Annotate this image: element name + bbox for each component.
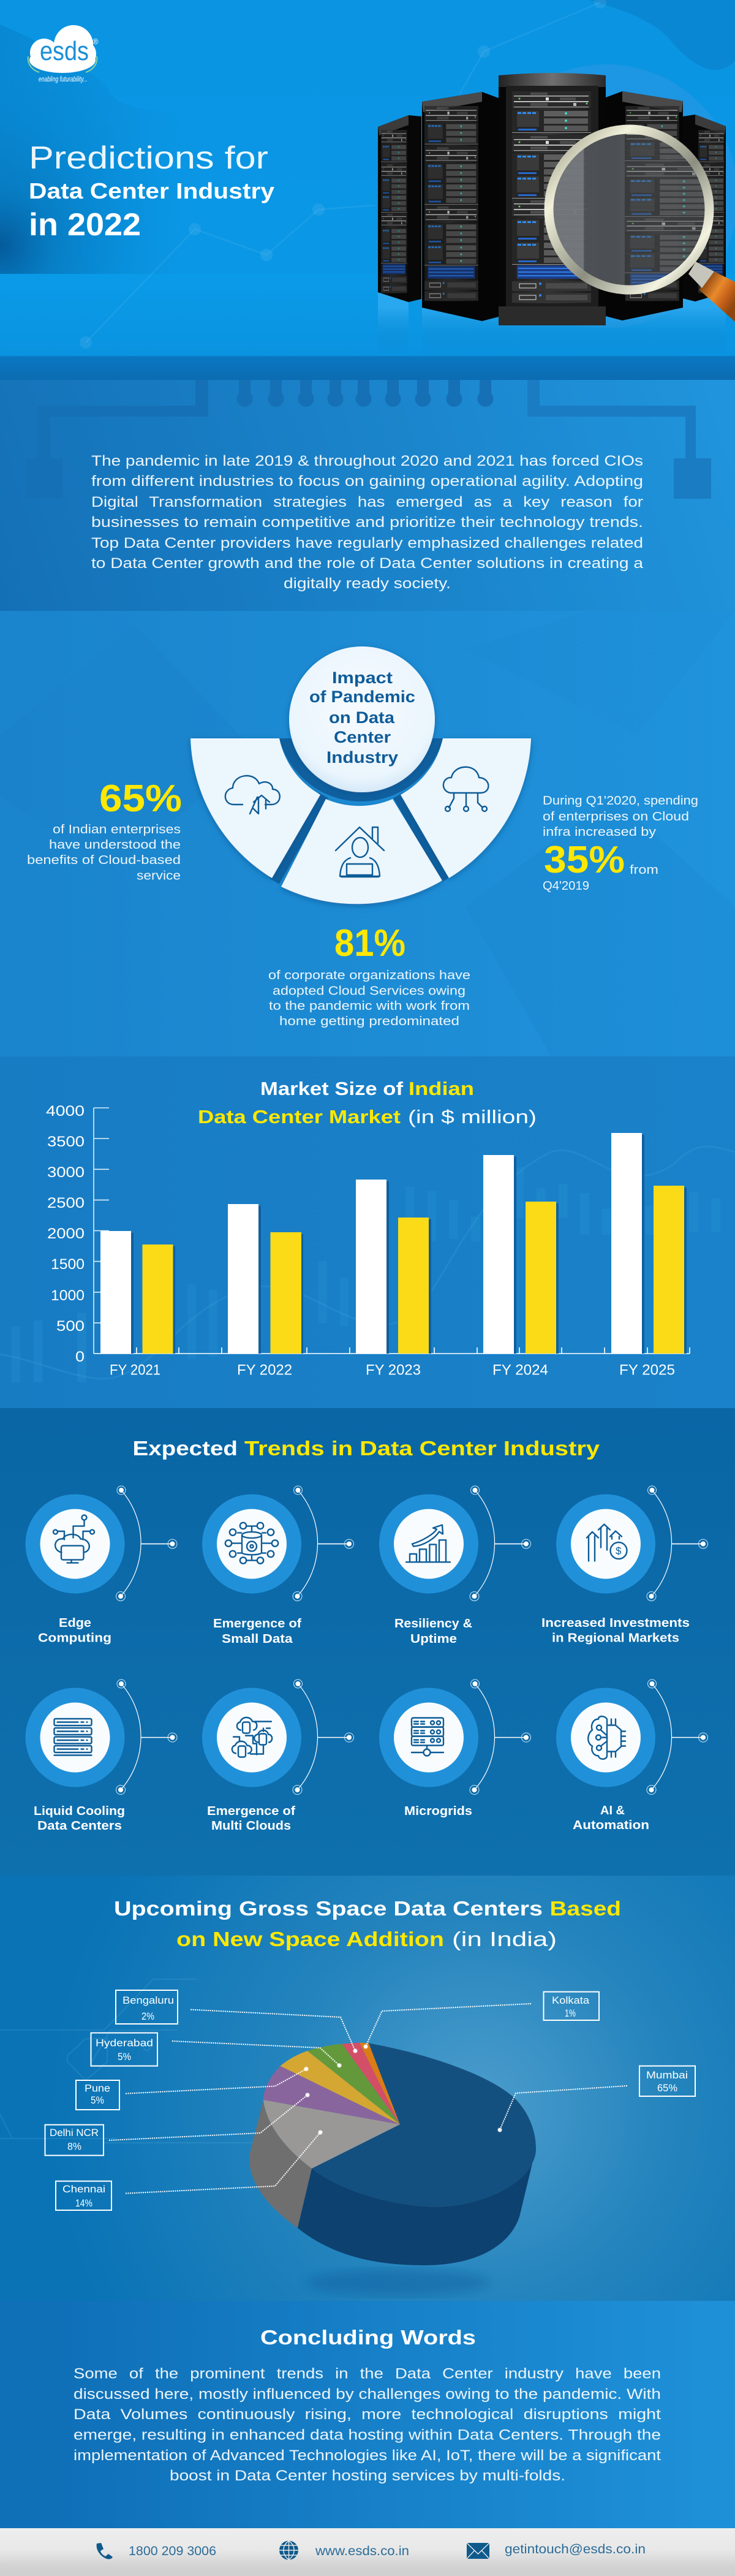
chart title: Indian bbox=[409, 1078, 474, 1099]
centre circle: Impact bbox=[332, 669, 393, 687]
trend: resiliency and uptime: Resiliency & bbox=[394, 1617, 472, 1631]
stat: 35%: During Q1'2020, spending bbox=[543, 794, 698, 808]
trend: regional investments: $ bbox=[616, 1545, 622, 1557]
segment: cloud network bbox=[401, 738, 531, 878]
trend: edge computing: Edge bbox=[59, 1616, 91, 1630]
stat: 81%: adopted Cloud Services owing bbox=[273, 984, 466, 998]
centre circle: on Data bbox=[329, 708, 395, 727]
illustration: server racks with magnifier bbox=[378, 73, 735, 327]
stat: 35%: Q4'2019 bbox=[543, 879, 589, 893]
logo: esds cloud bbox=[28, 25, 99, 83]
label: Bengaluru: Bengaluru bbox=[123, 1995, 174, 2006]
stat: 65%: service bbox=[137, 869, 181, 882]
contact: website: www.esds.co.in bbox=[315, 2544, 409, 2558]
heading: predictions title bbox=[29, 140, 274, 243]
text block: intro paragraph: from different industries to focus on gaining operational agility. Adopting bbox=[91, 473, 643, 490]
trend: emergence of small data bbox=[202, 1486, 354, 1646]
text block: concluding paragraph: Data Volumes continuously rising, more technological disruptions might bbox=[74, 2406, 661, 2423]
pie heading: Based bbox=[550, 1897, 621, 1920]
contact: email: getintouch@esds.co.in bbox=[505, 2542, 646, 2556]
pie heading bbox=[114, 1897, 621, 1950]
stat: 65%: have understood the bbox=[49, 838, 181, 852]
circuit board decoration bbox=[26, 380, 711, 499]
heading: predictions title: Data Center Industry bbox=[29, 178, 274, 203]
text block: intro paragraph bbox=[91, 453, 644, 592]
stat: 65%: benefits of Cloud-based bbox=[27, 853, 181, 867]
trend: microgrids: Microgrids bbox=[404, 1805, 472, 1818]
trend: multi clouds: Emergence of bbox=[207, 1805, 295, 1818]
trend: liquid cooling data centers bbox=[26, 1680, 177, 1833]
label: Kolkata: Kolkata bbox=[552, 1995, 590, 2006]
bars: FY 2025 bbox=[611, 1133, 687, 1354]
x axis: FY 2025 bbox=[619, 1362, 675, 1379]
trends heading: Expected bbox=[132, 1437, 238, 1460]
trend: edge computing: Computing bbox=[38, 1631, 111, 1645]
y axis: 1500 bbox=[51, 1256, 85, 1273]
leader lines bbox=[109, 2004, 627, 2194]
label: Pune bbox=[76, 2080, 119, 2110]
pie heading: (in India) bbox=[452, 1928, 557, 1950]
trend: edge computing bbox=[26, 1486, 177, 1645]
bars: FY 2024 bbox=[483, 1155, 559, 1354]
3D pie chart bbox=[249, 2043, 536, 2296]
label: Delhi NCR bbox=[45, 2125, 104, 2156]
trend: liquid cooling data centers: Liquid Cooling bbox=[34, 1805, 125, 1818]
x axis: FY 2021 bbox=[110, 1362, 160, 1379]
bars: FY 2023 bbox=[356, 1180, 431, 1354]
y axis: 2500 bbox=[47, 1195, 85, 1211]
concluding heading: Concluding Words bbox=[260, 2326, 476, 2349]
logo: esds cloud: enabling futurability... bbox=[39, 76, 88, 83]
text block: intro paragraph: Top Data Center providers have regularly emphasized challenges related bbox=[91, 535, 643, 551]
panel: hero header bbox=[0, 0, 735, 380]
text block: intro paragraph: digitally ready society. bbox=[284, 575, 451, 592]
trend: multi clouds: Multi Clouds bbox=[211, 1819, 291, 1833]
segment: work from home bbox=[281, 799, 442, 904]
panel: introduction bbox=[0, 380, 735, 611]
label: Pune: 5% bbox=[91, 2094, 104, 2106]
stat: 35%: from bbox=[630, 863, 658, 877]
stat: 81%: to the pandemic with work from bbox=[269, 999, 470, 1013]
y axis: 0 bbox=[75, 1349, 85, 1365]
label: Kolkata bbox=[544, 1992, 599, 2020]
trend: microgrids bbox=[379, 1680, 530, 1818]
label: Bengaluru: 2% bbox=[141, 2010, 154, 2022]
panel: expected trends bbox=[0, 1408, 735, 1876]
label: Chennai: 14% bbox=[75, 2197, 92, 2209]
trend: regional investments bbox=[541, 1486, 708, 1645]
centre circle: of Pandemic bbox=[309, 688, 415, 706]
y axis: 3000 bbox=[47, 1164, 85, 1181]
logo: esds cloud: ® bbox=[92, 37, 99, 46]
contact: phone: 1800 209 3006 bbox=[129, 2544, 216, 2558]
text block: concluding paragraph: emerge, resulting in enhanced data hosting within Data Centers. Through the bbox=[74, 2427, 661, 2444]
x axis: FY 2022 bbox=[237, 1362, 292, 1379]
heading: predictions title: in 2022 bbox=[29, 207, 141, 243]
label: Hyderabad: Hyderabad bbox=[96, 2037, 153, 2049]
label: Kolkata: 1% bbox=[565, 2007, 576, 2019]
centre circle: Center bbox=[334, 728, 391, 746]
stat: 35%: of enterprises on Cloud bbox=[543, 809, 689, 824]
stat: 35%: infra increased by bbox=[543, 825, 657, 839]
label: Delhi NCR: 8% bbox=[67, 2141, 81, 2153]
text block: concluding paragraph: implementation of Advanced Technologies like AI, IoT, there will be a significant bbox=[74, 2447, 661, 2464]
y axis: 2000 bbox=[47, 1225, 85, 1242]
stat: 81%: 81% bbox=[334, 922, 405, 964]
trend: AI and automation: Automation bbox=[573, 1819, 649, 1832]
trends heading bbox=[132, 1437, 600, 1460]
trend: regional investments: Increased Investments bbox=[541, 1616, 690, 1630]
footer: contact bar bbox=[0, 2528, 735, 2576]
text block: intro paragraph: Digital Transformation strategies has emerged as a key reason for bbox=[91, 494, 643, 510]
y axis: 1000 bbox=[51, 1287, 85, 1304]
logo: esds cloud: esds bbox=[40, 36, 89, 66]
label: Chennai bbox=[56, 2181, 111, 2210]
chart title bbox=[198, 1078, 537, 1127]
stat: 65%: 65% bbox=[99, 778, 182, 820]
y axis bbox=[46, 1103, 109, 1365]
trend: resiliency and uptime: Uptime bbox=[410, 1632, 457, 1646]
panel: impact of pandemic bbox=[0, 611, 735, 1056]
centre circle bbox=[289, 646, 435, 792]
y axis: 4000 bbox=[46, 1103, 85, 1119]
trend: emergence of small data: Small Data bbox=[222, 1632, 293, 1646]
label: Bengaluru bbox=[116, 1990, 178, 2024]
stat: 65% bbox=[27, 778, 182, 882]
stat: 81%: of corporate organizations have bbox=[268, 968, 470, 982]
label: Chennai: Chennai bbox=[62, 2183, 105, 2195]
x axis bbox=[94, 1347, 690, 1379]
panel: market size chart bbox=[0, 1056, 735, 1408]
text block: concluding paragraph bbox=[74, 2366, 661, 2484]
x axis: FY 2023 bbox=[366, 1362, 421, 1379]
trend: AI and automation: AI & bbox=[600, 1804, 625, 1817]
magnifying glass bbox=[549, 126, 735, 322]
chart title: Data Center Market bbox=[198, 1106, 401, 1127]
bars: FY 2022 bbox=[228, 1204, 303, 1354]
trend: liquid cooling data centers: Data Centers bbox=[37, 1819, 122, 1833]
y axis: 500 bbox=[56, 1318, 85, 1335]
bars: FY 2021 bbox=[100, 1231, 175, 1354]
fan diagram bbox=[190, 646, 531, 904]
panel: concluding words bbox=[0, 2301, 735, 2528]
trend: multi clouds bbox=[202, 1680, 354, 1833]
bar chart bbox=[46, 1103, 690, 1379]
trend: regional investments: in Regional Markets bbox=[552, 1631, 679, 1645]
x axis: FY 2024 bbox=[492, 1362, 548, 1379]
stat: 65%: of Indian enterprises bbox=[53, 822, 181, 836]
contact: email bbox=[467, 2542, 646, 2559]
text block: intro paragraph: to Data Center growth and the role of Data Center solutions in creating a bbox=[91, 555, 644, 572]
stat: 81% bbox=[268, 922, 470, 1028]
trends heading: Trends in Data Center Industry bbox=[244, 1437, 600, 1460]
trend: resiliency and uptime bbox=[379, 1486, 530, 1646]
text block: intro paragraph: businesses to remain competitive and prioritize their technology trends. bbox=[91, 514, 643, 531]
segment: cloud transfer bbox=[190, 738, 320, 878]
contact: phone bbox=[97, 2543, 216, 2559]
pie heading: Upcoming Gross Space Data Centers bbox=[114, 1897, 543, 1920]
label: Mumbai: Mumbai bbox=[646, 2069, 688, 2081]
trend: AI and automation bbox=[556, 1680, 708, 1832]
y axis: 3500 bbox=[47, 1134, 85, 1150]
pie heading: on New Space Addition bbox=[176, 1928, 444, 1950]
label: Mumbai: 65% bbox=[657, 2082, 677, 2094]
text block: intro paragraph: The pandemic in late 2019 & throughout 2020 and 2021 has forced CIOs bbox=[91, 453, 643, 469]
text block: concluding paragraph: Some of the prominent trends in the Data Center industry have been bbox=[74, 2366, 661, 2382]
label: Hyderabad: 5% bbox=[118, 2051, 131, 2063]
stat: 81%: home getting predominated bbox=[279, 1014, 459, 1028]
heading: predictions title: Predictions for bbox=[29, 140, 268, 176]
text block: concluding paragraph: boost in Data Center hosting services by multi-folds. bbox=[170, 2468, 565, 2484]
label: Delhi NCR: Delhi NCR bbox=[50, 2127, 99, 2138]
contact: website bbox=[279, 2540, 409, 2560]
chart title: (in $ million) bbox=[408, 1106, 537, 1127]
label: Mumbai bbox=[639, 2066, 695, 2096]
text block: concluding paragraph: discussed here, mostly influenced by challenges owing to the pandemic. With bbox=[74, 2386, 661, 2403]
centre circle: Industry bbox=[326, 748, 398, 767]
stat: 35%: 35% bbox=[544, 839, 625, 881]
panel: upcoming gross space pie chart bbox=[0, 1876, 735, 2301]
chart title: Market Size of bbox=[260, 1078, 404, 1099]
trend: emergence of small data: Emergence of bbox=[213, 1617, 301, 1631]
label: Hyderabad bbox=[91, 2033, 157, 2066]
stat: 35% bbox=[543, 794, 698, 893]
label: Pune: Pune bbox=[85, 2083, 110, 2094]
